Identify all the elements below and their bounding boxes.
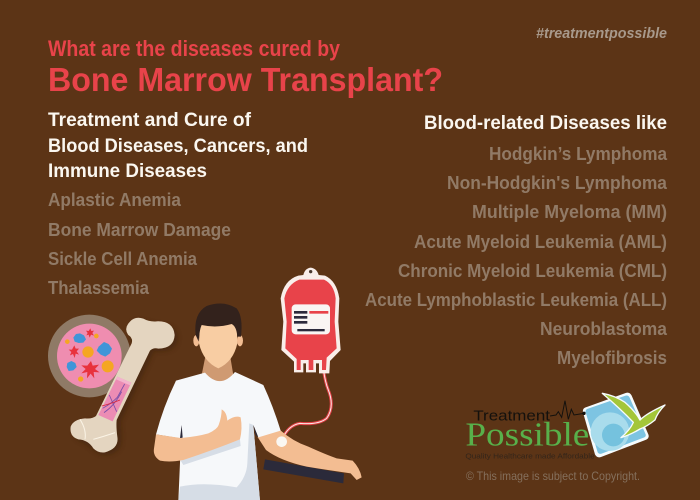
icon: petri dish with cells — [48, 315, 131, 397]
body — [154, 372, 362, 500]
left heading: Blood Diseases, Cancers, and — [48, 136, 308, 157]
right disease list: Myelofibrosis — [557, 348, 667, 368]
hashtag: #treatmentpossible — [536, 26, 667, 42]
marrow section — [98, 377, 131, 421]
illustration: patient — [154, 303, 362, 500]
left disease list: Thalassemia — [48, 278, 150, 298]
logo: Treatment Possible — [465, 393, 665, 461]
left arm with thumb up — [154, 409, 242, 462]
copyright note: © This image is subject to Copyright. — [466, 469, 640, 483]
icon: IV tube — [282, 368, 331, 440]
logo: green bird — [602, 393, 665, 438]
shirt shadow — [178, 423, 260, 500]
left heading — [48, 110, 308, 182]
right disease list: Neuroblastoma — [540, 319, 668, 339]
shirt — [156, 372, 281, 500]
left disease list — [48, 190, 231, 298]
logo: heartbeat line — [550, 401, 586, 419]
logo: blue square — [583, 393, 649, 457]
right disease list: Chronic Myeloid Leukemia (CML) — [398, 261, 667, 281]
cannula patch — [276, 436, 287, 447]
right disease list: Hodgkin’s Lymphoma — [489, 144, 668, 164]
title: Bone Marrow Transplant? — [48, 61, 443, 98]
logo: text: Quality Healthcare made Affordable — [465, 452, 595, 461]
left disease list: Sickle Cell Anemia — [48, 249, 198, 269]
left disease list: Aplastic Anemia — [48, 190, 182, 210]
logo: text: Possible — [465, 417, 589, 454]
right disease list: Multiple Myeloma (MM) — [472, 202, 667, 222]
left disease list: Bone Marrow Damage — [48, 220, 231, 240]
title — [48, 36, 443, 98]
left heading: Immune Diseases — [48, 161, 207, 182]
right heading: Blood-related Diseases like — [424, 113, 667, 134]
right disease list: Acute Myeloid Leukemia (AML) — [414, 232, 667, 252]
logo: text: Treatment — [473, 409, 550, 425]
right disease list: Non-Hodgkin's Lymphoma — [447, 173, 668, 193]
right disease list — [365, 144, 668, 368]
left heading: Treatment and Cure of — [48, 110, 252, 131]
logo: text — [465, 409, 595, 461]
icon: bone with marrow — [70, 318, 178, 455]
armrest — [263, 459, 344, 483]
neck and head — [193, 303, 243, 386]
right arm — [257, 430, 362, 480]
arm shadow — [181, 439, 241, 465]
icon: blood bag — [281, 268, 341, 373]
right disease list: Acute Lymphoblastic Leukemia (ALL) — [365, 290, 667, 310]
title: What are the diseases cured by — [48, 36, 341, 61]
